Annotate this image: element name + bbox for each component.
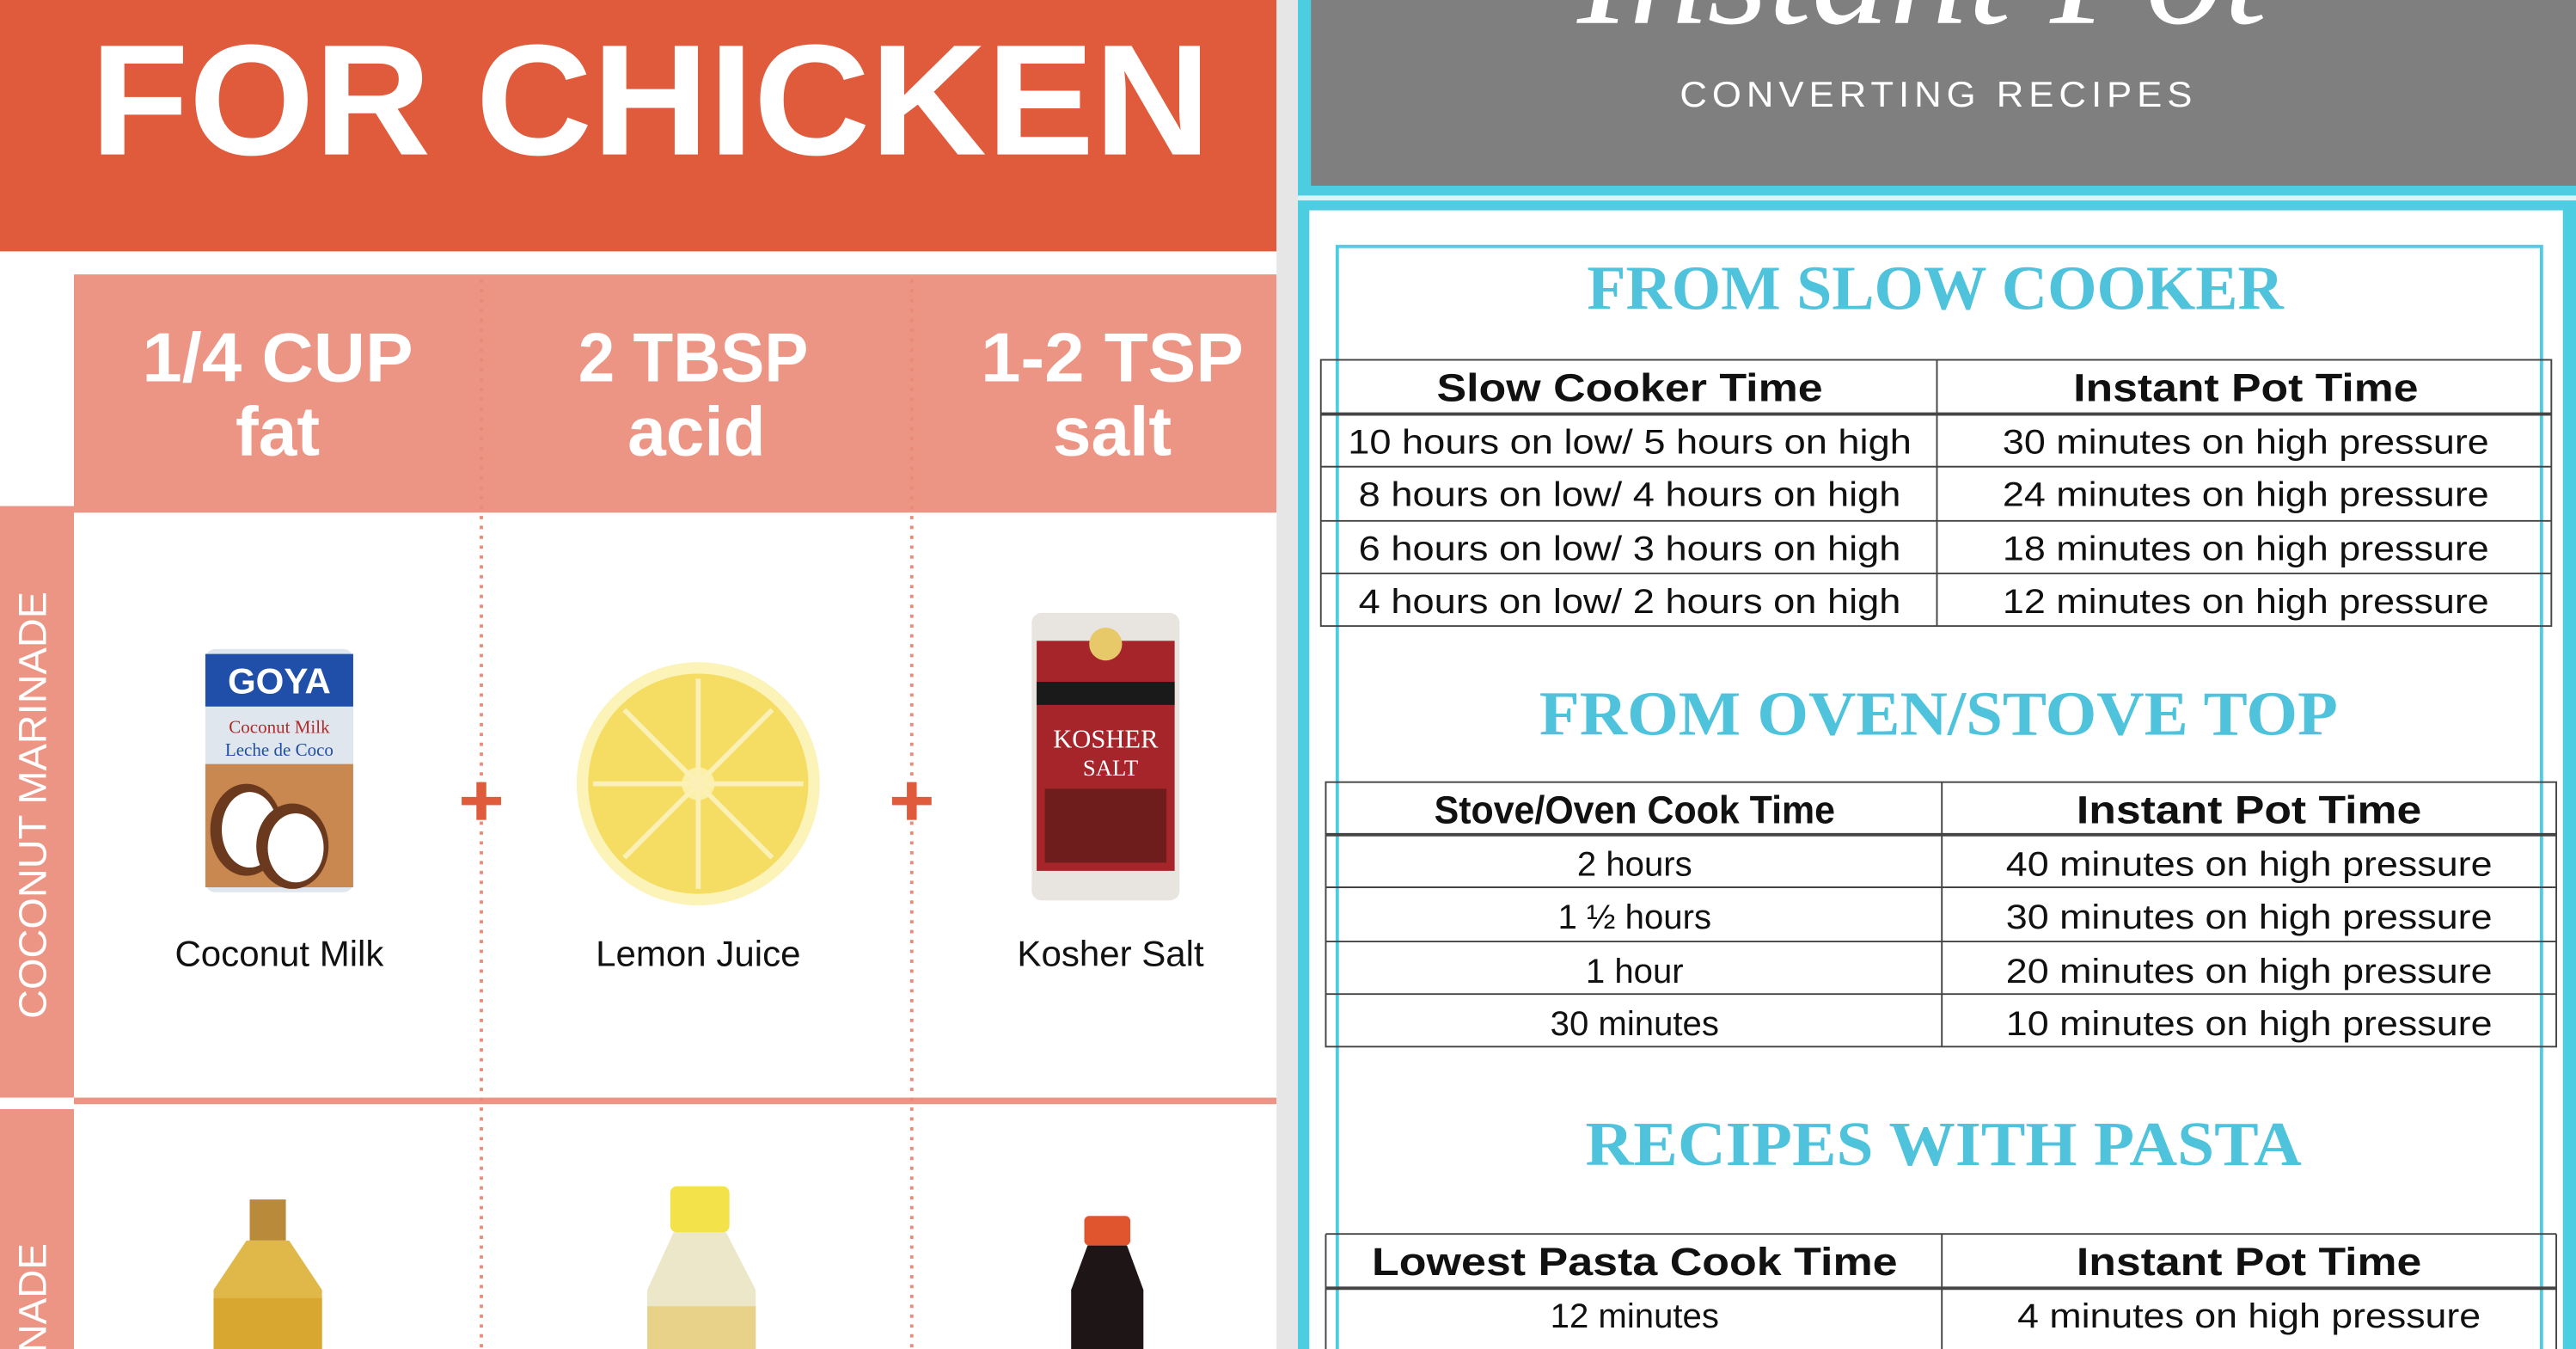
icon: kosher salt container	[1031, 613, 1179, 900]
table: oven/stove top	[1325, 782, 2556, 1046]
header: instant pot title	[1311, 0, 2576, 186]
icon: coconut milk can: Coconut Milk	[229, 716, 330, 737]
table: oven/stove top: 2 hours	[1577, 845, 1692, 884]
table: slow cooker: 8 hours on low/ 4 hours on high	[1359, 475, 1900, 514]
heading: from slow cooker: FROM SLOW COOKER	[1587, 253, 2285, 322]
table: slow cooker: Instant Pot Time	[2073, 365, 2419, 409]
row label: coconut marinade	[0, 506, 74, 1098]
icon: soy sauce bottle	[1071, 1216, 1143, 1349]
title banner	[0, 0, 1276, 251]
header: instant pot title: CONVERTING RECIPES	[1680, 74, 2197, 114]
column headers: 1-2 TSP	[981, 319, 1244, 396]
icon: plus sign	[892, 782, 932, 820]
table: oven/stove top: Stove/Oven Cook Time	[1435, 787, 1835, 831]
icon: coconut milk can: GOYA	[228, 660, 331, 701]
table: oven/stove top: 10 minutes on high pressure	[2006, 1004, 2493, 1043]
row label: coconut marinade: COCONUT MARINADE	[10, 592, 55, 1019]
panel: chicken marinade chart	[0, 0, 1276, 1349]
table: oven/stove top: 20 minutes on high pressure	[2006, 952, 2493, 990]
table: pasta: 12 minutes	[1551, 1297, 1719, 1335]
title banner: FOR CHICKEN	[90, 12, 1211, 188]
table: slow cooker: Slow Cooker Time	[1436, 365, 1823, 409]
table: oven/stove top: 40 minutes on high pressure	[2006, 845, 2493, 884]
table: slow cooker: 18 minutes on high pressure	[2003, 530, 2489, 568]
column headers	[74, 274, 1276, 512]
table: slow cooker: 6 hours on low/ 3 hours on high	[1359, 530, 1900, 568]
row label: second marinade	[0, 1109, 74, 1349]
table: slow cooker: 4 hours on low/ 2 hours on high	[1359, 582, 1900, 621]
column headers: salt	[1053, 393, 1172, 470]
kosher salt label: Kosher Salt	[1017, 934, 1204, 974]
coconut milk label: Coconut Milk	[174, 934, 384, 974]
heading: from oven/stove top: FROM OVEN/STOVE TOP	[1539, 678, 2338, 748]
table: pasta: Lowest Pasta Cook Time	[1372, 1239, 1898, 1284]
divider strip	[1276, 0, 1298, 1349]
heading: recipes with pasta: RECIPES WITH PASTA	[1585, 1109, 2302, 1179]
table: oven/stove top: 1 hour	[1586, 952, 1684, 990]
table: slow cooker: 24 minutes on high pressure	[2003, 475, 2489, 514]
table: oven/stove top: 1 ½ hours	[1558, 898, 1711, 936]
column headers: acid	[627, 393, 766, 470]
table: slow cooker: 12 minutes on high pressure	[2003, 582, 2489, 621]
icon: coconut milk can	[205, 649, 353, 892]
icon: coconut milk can: Leche de Coco	[225, 739, 333, 760]
table: oven/stove top: 30 minutes	[1551, 1004, 1719, 1043]
table: slow cooker	[1321, 360, 2551, 626]
table: pasta	[1325, 1234, 2556, 1349]
column headers: fat	[236, 393, 320, 470]
table: oven/stove top: Instant Pot Time	[2077, 787, 2421, 831]
icon: vinegar bottle	[647, 1187, 756, 1349]
column headers: 2 TBSP	[578, 319, 808, 396]
table: pasta: Instant Pot Time	[2077, 1239, 2421, 1284]
table: slow cooker: 10 hours on low/ 5 hours on high	[1348, 422, 1912, 461]
table: slow cooker: 30 minutes on high pressure	[2003, 422, 2489, 461]
lemon juice label: Lemon Juice	[596, 934, 800, 974]
icon: oil bottle	[213, 1199, 322, 1349]
table: pasta: 4 minutes on high pressure	[2017, 1297, 2481, 1335]
column headers: 1/4 CUP	[142, 319, 413, 396]
table: oven/stove top: 30 minutes on high pressure	[2006, 898, 2493, 936]
icon: lemon slice	[577, 662, 820, 905]
icon: kosher salt container: KOSHER	[1053, 725, 1159, 754]
icon: plus sign	[462, 782, 501, 820]
panel: instant pot converting recipes	[1298, 0, 2576, 1349]
icon: kosher salt container: SALT	[1083, 755, 1138, 781]
